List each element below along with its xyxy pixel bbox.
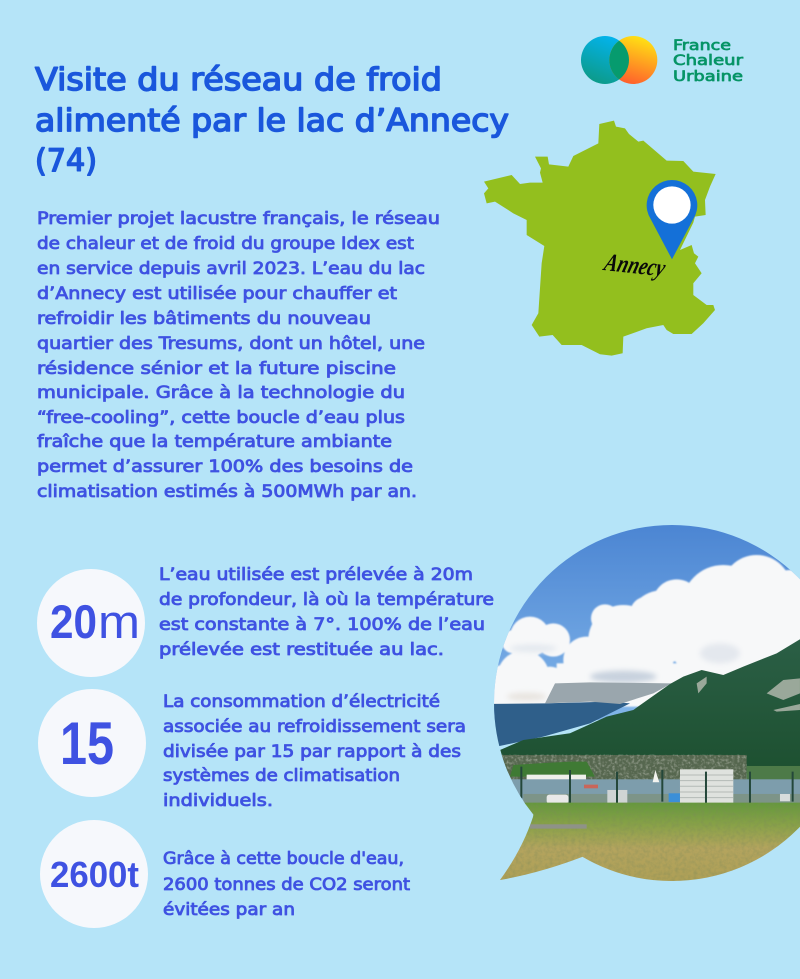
intro paragraph: fraîche que la température ambiante	[37, 432, 392, 451]
boats and objects	[653, 770, 659, 782]
stat text	[159, 565, 494, 659]
stat text	[163, 692, 466, 810]
title: (74)	[35, 143, 97, 179]
stat number: 2600t	[50, 854, 139, 895]
logo mark: overlapping circles	[581, 36, 657, 84]
stat number: 15	[60, 710, 114, 777]
stat text: divisée par 15 par rapport à des	[163, 742, 461, 761]
intro paragraph: climatisation estimés à 500MWh par an.	[37, 482, 417, 501]
intro paragraph: “free-cooling”, cette boucle d’eau plus	[37, 408, 405, 427]
logo wordmark: France	[673, 38, 731, 54]
far blue mountain	[490, 702, 630, 747]
intro paragraph: refroidir les bâtiments du nouveau	[37, 309, 371, 328]
stat text: La consommation d’électricité	[163, 692, 440, 711]
sky	[490, 520, 800, 720]
stat 1: 20m	[37, 565, 494, 677]
grass field	[490, 803, 800, 886]
stat circle	[37, 569, 145, 677]
map shape	[484, 121, 716, 356]
lake	[500, 779, 800, 804]
stat 2: 15	[38, 689, 466, 810]
intro paragraph: d’Annecy est utilisée pour chauffer et	[37, 284, 398, 303]
intro paragraph: Premier projet lacustre français, le réseau	[37, 209, 440, 228]
stat circle	[38, 689, 146, 797]
stat number: m	[98, 595, 140, 648]
photo of Lake Annecy in speech bubble	[485, 520, 800, 886]
intro paragraph: quartier des Tresums, dont un hôtel, une	[37, 334, 425, 353]
stat number: 20	[50, 595, 97, 648]
intro paragraph: de chaleur et de froid du groupe Idex est	[37, 234, 415, 253]
title: alimenté par le lac d’Annecy	[35, 103, 509, 139]
rocky cliff	[545, 682, 672, 704]
stat text: associée au refroidissement sera	[163, 717, 466, 736]
stat text: évitées par an	[163, 900, 295, 919]
logo wordmark	[673, 38, 743, 85]
stat text: prélevée est restituée au lac.	[159, 640, 444, 659]
intro paragraph	[37, 209, 440, 501]
stat text: 2600 tonnes de CO2 seront	[163, 875, 411, 894]
green mountain	[500, 637, 800, 773]
fence posts	[521, 767, 793, 804]
stat text: de profondeur, là où la température	[159, 590, 494, 609]
map of France with Annecy marker	[484, 121, 716, 356]
map label: Annecy: Annecy	[600, 249, 669, 282]
stat text: est constante à 7°. 100% de l’eau	[159, 615, 485, 634]
cloud shadows	[507, 643, 740, 701]
stat text: L’eau utilisée est prélevée à 20m	[159, 565, 473, 584]
title: Visite du réseau de froid	[35, 62, 442, 98]
stat 3: 2600t	[40, 820, 411, 928]
stat text: Grâce à cette boucle d'eau,	[163, 849, 404, 868]
stat number	[50, 595, 140, 648]
stat text: systèmes de climatisation	[163, 766, 400, 785]
logo wordmark: Chaleur	[673, 53, 743, 69]
mountain rock patches	[697, 677, 800, 712]
title	[35, 62, 509, 179]
intro paragraph: permet d’assurer 100% des besoins de	[37, 457, 413, 476]
concrete slab	[530, 824, 587, 829]
village	[500, 755, 747, 780]
logo: France Chaleur Urbaine	[581, 36, 743, 85]
stat text	[163, 849, 411, 919]
intro paragraph: en service depuis avril 2023. L’eau du lac	[37, 259, 425, 278]
stat circle	[40, 820, 148, 928]
stat text: individuels.	[163, 791, 273, 810]
clouds	[485, 555, 800, 707]
logo wordmark: Urbaine	[673, 69, 743, 85]
white striped enclosure	[680, 769, 733, 804]
intro paragraph: résidence sénior et la future piscine	[37, 359, 396, 378]
map pin	[647, 180, 697, 259]
intro paragraph: municipale. Grâce à la technologie du	[37, 383, 405, 402]
